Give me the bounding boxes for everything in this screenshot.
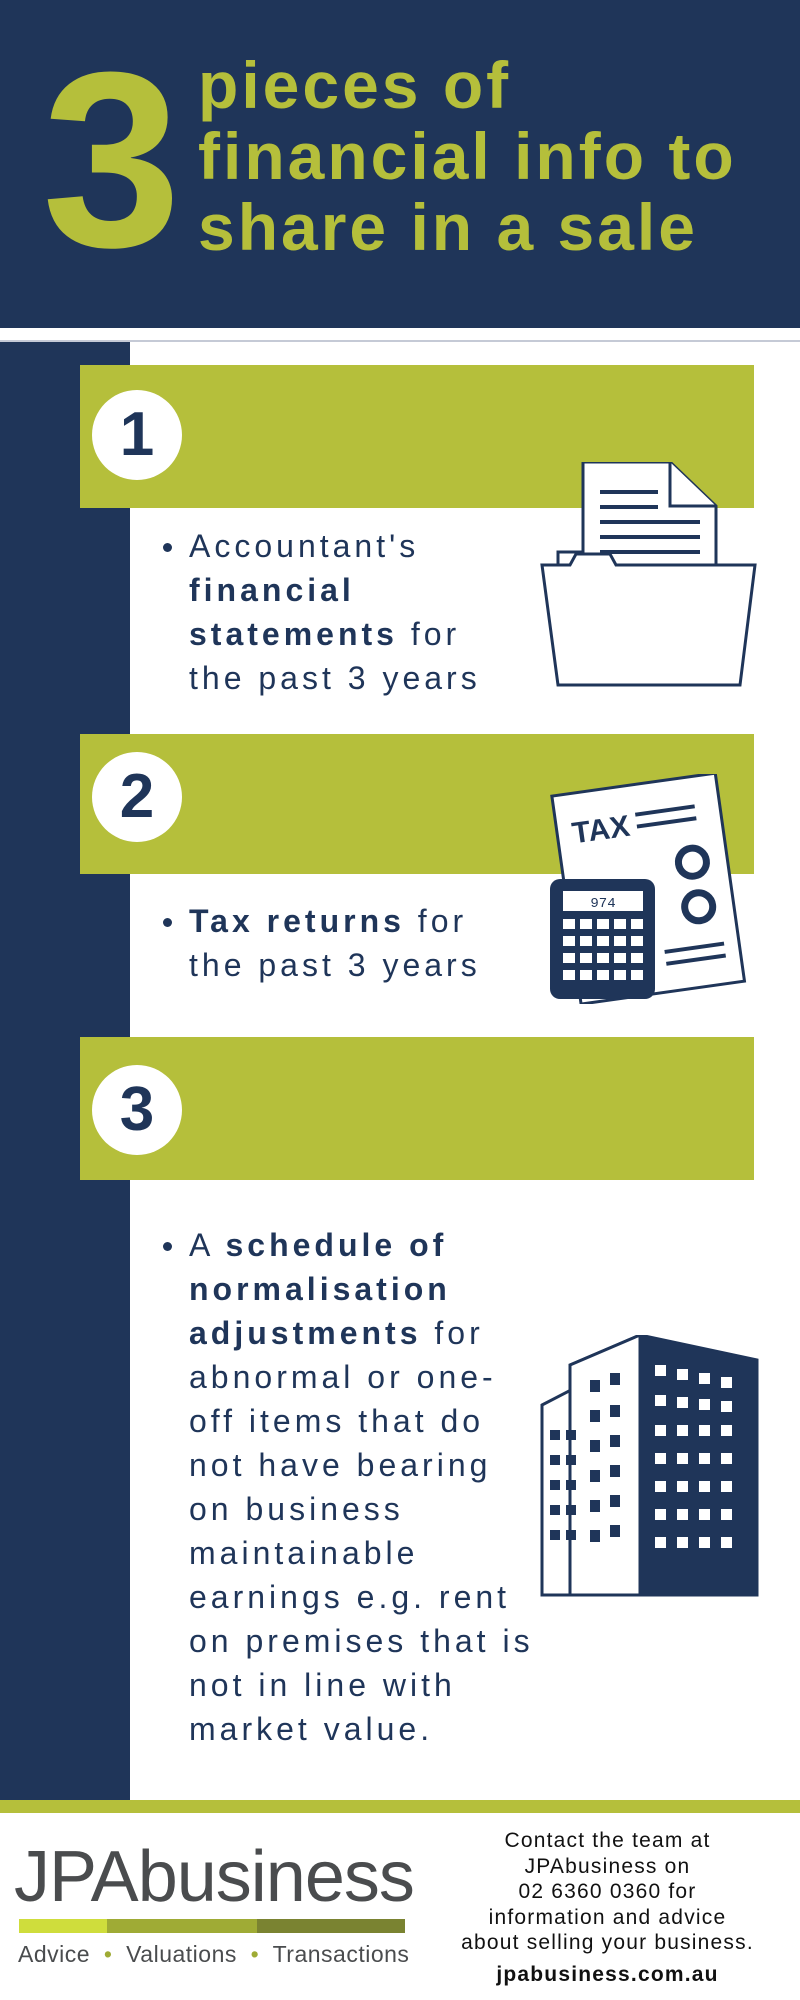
text 2	[163, 903, 481, 983]
bar 2	[80, 734, 754, 874]
icon: tax form and calculator	[550, 774, 746, 1004]
panel 3	[80, 1037, 758, 1747]
contact text: jpabusiness.com.au	[496, 1962, 719, 1986]
icon: tax form and calculator: 974	[590, 896, 616, 912]
text 3: abnormal or one-	[189, 1359, 497, 1395]
text 3: normalisation	[189, 1271, 451, 1307]
text 3: on premises that is	[189, 1623, 534, 1659]
title: pieces of	[198, 48, 511, 122]
sidebar	[0, 342, 130, 1800]
big number 3: 3	[42, 20, 177, 299]
header	[0, 0, 800, 328]
footer logo	[14, 1837, 414, 1967]
title: share in a sale	[198, 190, 698, 264]
text 3: maintainable	[189, 1535, 418, 1571]
text 2: Tax returns for	[189, 903, 467, 939]
contact text: about selling your business.	[461, 1931, 754, 1954]
text 1	[163, 528, 481, 696]
text 3: earnings e.g. rent	[189, 1579, 510, 1615]
text 3: not have bearing	[189, 1447, 491, 1483]
icon: folder with documents	[540, 462, 757, 686]
number 3: 3	[120, 1075, 154, 1144]
logo color bar	[19, 1919, 107, 1933]
number 1: 1	[120, 400, 154, 469]
bar 3	[80, 1037, 754, 1180]
text 1: Accountant's	[189, 528, 419, 564]
text 3	[163, 1227, 534, 1747]
number 2: 2	[120, 762, 154, 831]
title	[198, 48, 737, 264]
green footer divider	[0, 1800, 800, 1813]
text 3: adjustments for	[189, 1315, 484, 1351]
contact text	[461, 1829, 754, 1986]
icon: tax form and calculator: TAX	[570, 810, 632, 850]
text 1: the past 3 years	[189, 660, 481, 696]
number 1	[92, 390, 182, 480]
text 1: statements for	[189, 616, 460, 652]
panel 2	[80, 734, 754, 1004]
bar 1	[80, 365, 754, 508]
text 3: off items that do	[189, 1403, 484, 1439]
title: financial info to	[198, 119, 737, 193]
text 3: A schedule of	[189, 1227, 447, 1263]
text 3: market value.	[189, 1711, 433, 1747]
number 2	[92, 752, 182, 842]
text 3: on business	[189, 1491, 404, 1527]
contact text: information and advice	[489, 1906, 726, 1928]
number 3	[92, 1065, 182, 1155]
logo wordmark: JPAbusiness	[14, 1837, 414, 1917]
text 2: the past 3 years	[189, 947, 481, 983]
contact text: Contact the team at	[504, 1829, 711, 1852]
tagline: Advice • Valuations • Transactions	[18, 1941, 409, 1967]
panel 1	[80, 365, 757, 696]
text 3: not in line with	[189, 1667, 456, 1703]
contact text: JPAbusiness on	[525, 1854, 690, 1878]
icon: office building	[540, 1335, 758, 1596]
contact text: 02 6360 0360 for	[518, 1880, 696, 1903]
text 1: financial	[189, 572, 355, 608]
